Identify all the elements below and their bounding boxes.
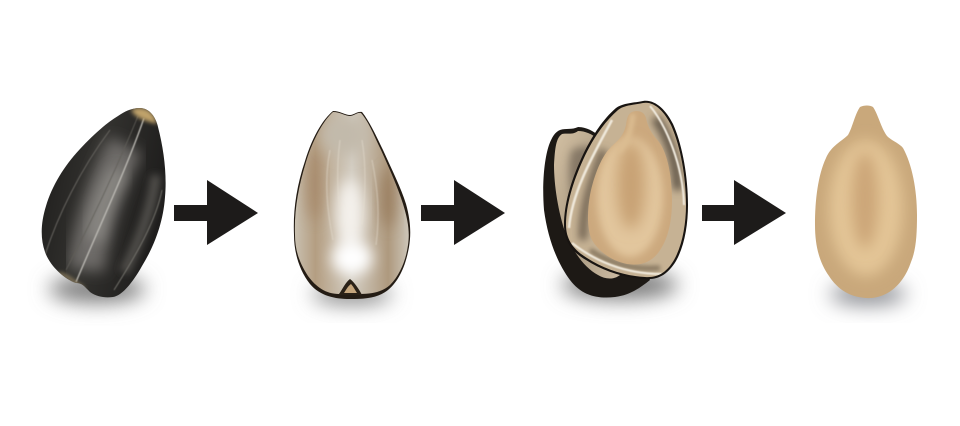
seed 2 ground shadow xyxy=(312,283,392,305)
seed 1: whole black sunflower seed xyxy=(42,108,166,303)
arrow 3 xyxy=(702,180,786,245)
seed 3 front shell rim xyxy=(564,101,688,279)
seed 2 highlights and fibres xyxy=(306,115,396,275)
seed 2 dark rim xyxy=(294,111,410,299)
seed 3: opened hull with kernel xyxy=(543,101,688,300)
seed 4 ground shadow xyxy=(830,283,906,305)
seed 3 front shell shading xyxy=(569,106,684,274)
seed 2 base notch xyxy=(339,279,362,295)
seed 1 sheen and stripes xyxy=(45,108,162,290)
seed 4: hulled kernel xyxy=(815,106,917,305)
seed 3 ground shadow xyxy=(562,270,678,300)
arrow 2 xyxy=(421,180,505,245)
seed 3 back shell shading xyxy=(569,146,596,215)
seed 1 ground shadow xyxy=(49,275,145,303)
seed 1 hull xyxy=(42,108,166,297)
seed 2 inner surface xyxy=(295,112,409,294)
seed 3 kernel shading xyxy=(597,114,663,257)
seed 3 back shell xyxy=(543,127,650,298)
seed 3 kernel xyxy=(588,111,672,265)
arrow 1 xyxy=(174,180,258,245)
infographic: sunflower seed hulling sequence xyxy=(39,100,917,319)
seed 2: half hull, inner side xyxy=(294,111,410,305)
seed 3 front shell inner xyxy=(566,103,686,277)
seed 4 kernel shading xyxy=(829,113,903,276)
seed 3 back shell inner xyxy=(554,131,622,279)
seed 4 kernel body xyxy=(815,106,917,298)
